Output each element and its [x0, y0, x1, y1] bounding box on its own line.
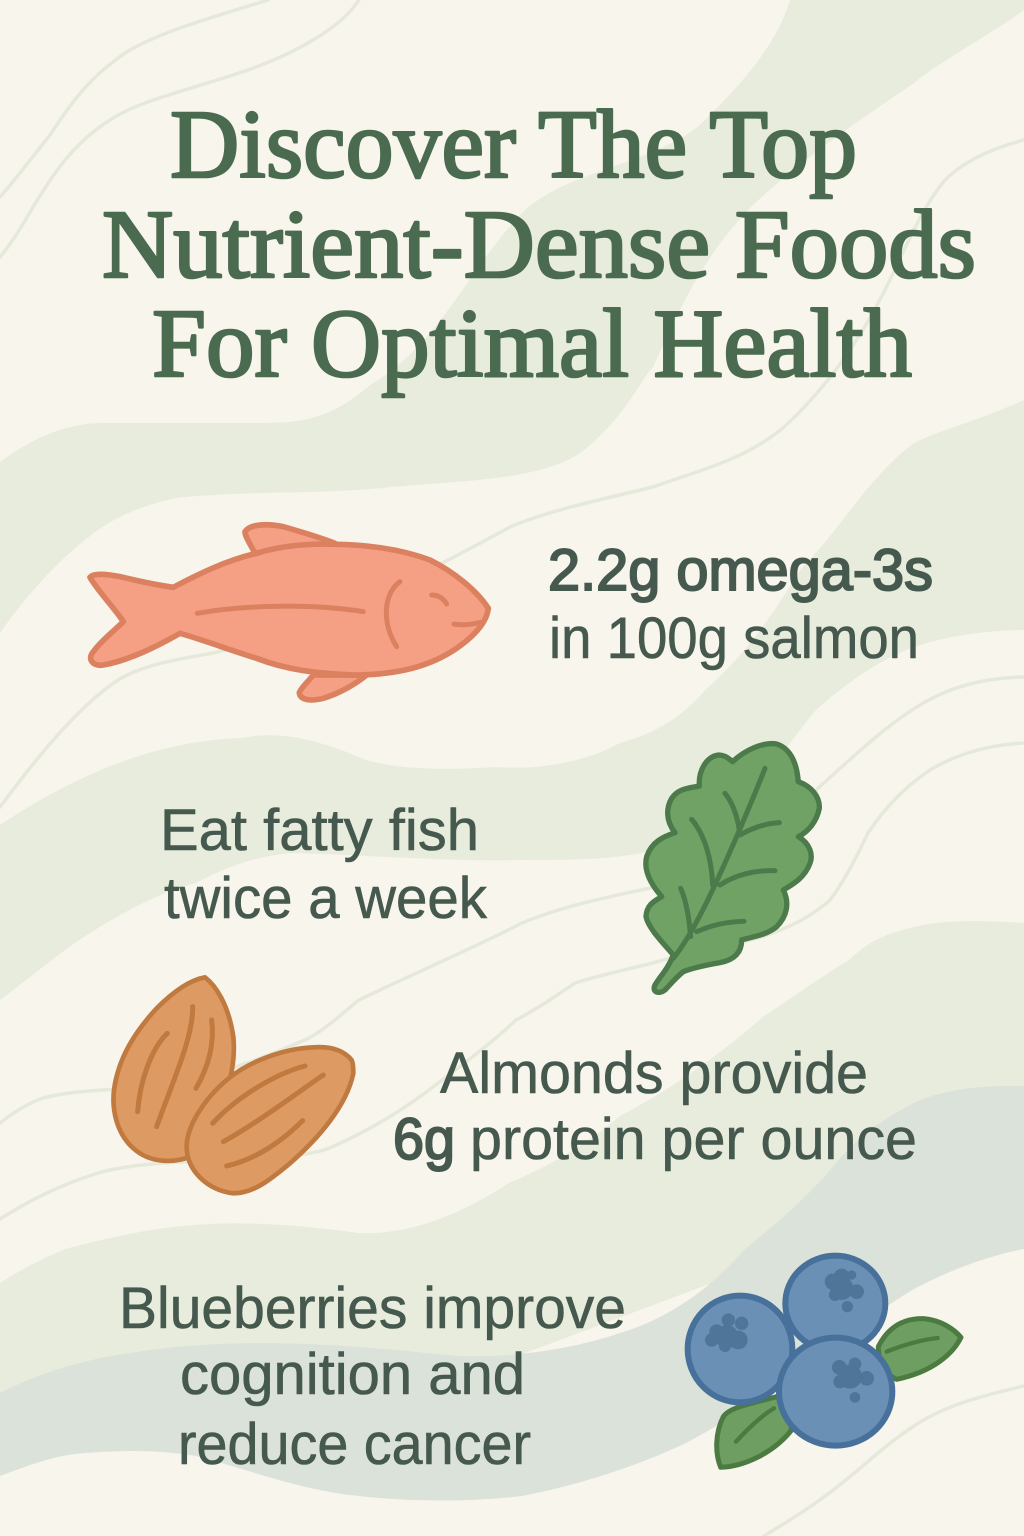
icon: salmon fish — [90, 525, 488, 700]
text: omega-3 fact — [548, 538, 933, 671]
title: Discover The Top — [170, 91, 857, 199]
title — [102, 91, 976, 398]
text: fatty fish advice: twice a week — [164, 866, 488, 931]
text: fatty fish advice: Eat fatty fish — [160, 798, 479, 863]
text: omega-3 fact: 2.2g omega-3s — [548, 538, 933, 603]
text: almonds protein — [393, 1041, 917, 1172]
icon: almonds — [113, 977, 353, 1193]
text: almonds protein: protein per ounce — [470, 1107, 917, 1172]
text: omega-3 fact: in 100g salmon — [549, 606, 919, 671]
text: blueberries benefit: reduce cancer — [178, 1412, 531, 1477]
text: fatty fish advice — [160, 798, 488, 931]
title: Nutrient-Dense Foods — [102, 191, 976, 299]
text: blueberries benefit: cognition and — [180, 1342, 525, 1407]
text: almonds protein: 6g — [393, 1107, 455, 1172]
title: For Optimal Health — [152, 290, 912, 398]
text: blueberries benefit — [119, 1276, 626, 1477]
icon: kale leaf — [646, 744, 819, 992]
icon: blueberries — [688, 1256, 961, 1467]
text: almonds protein: Almonds provide — [440, 1041, 868, 1106]
text: blueberries benefit: Blueberries improve — [119, 1276, 626, 1341]
